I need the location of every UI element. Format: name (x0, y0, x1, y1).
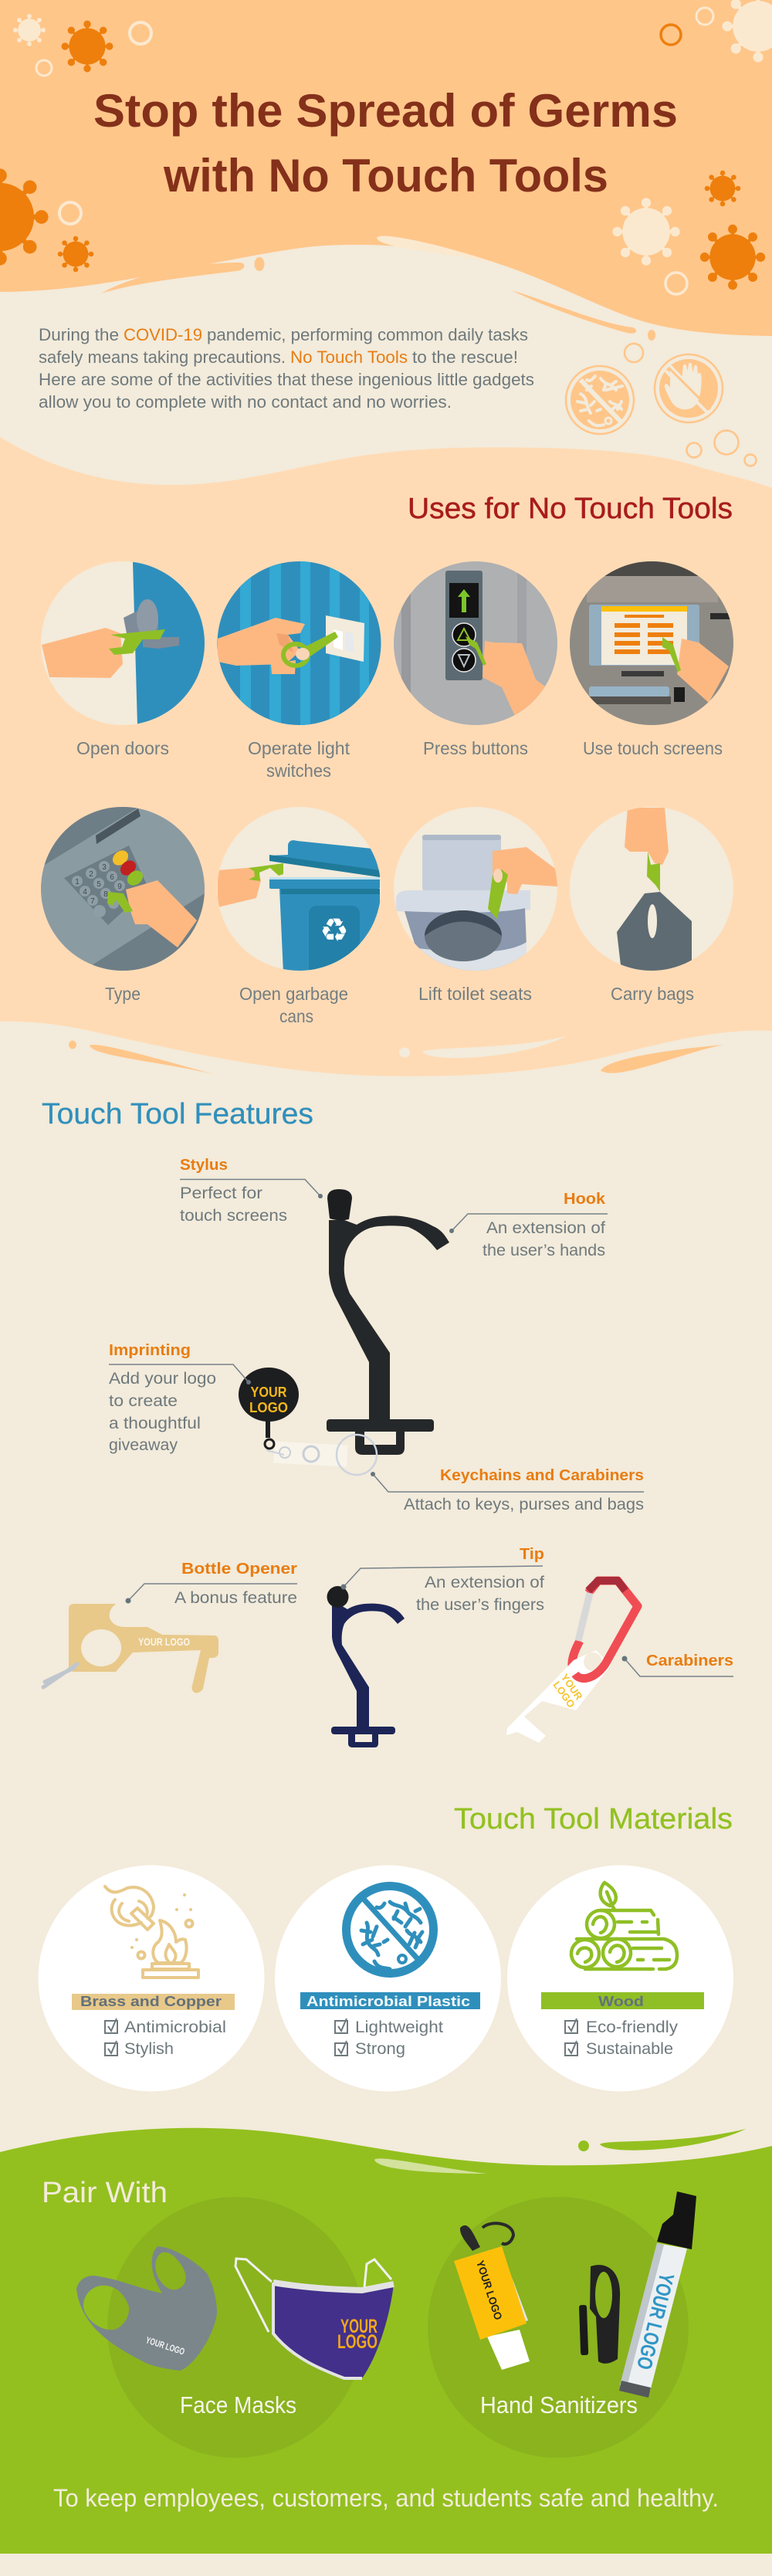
labels: uses row 1: switches (266, 761, 331, 781)
icon: recycle symbol: ♻ (320, 911, 349, 949)
decorative germs: left (0, 170, 93, 272)
panel: face masks circle (107, 2197, 364, 2458)
panel: hand sanitizers circle (428, 2197, 689, 2458)
labels: uses row 1: Use touch screens (583, 738, 723, 758)
use: operate light switches (217, 561, 381, 725)
callout: hook (449, 1191, 608, 1259)
product: clip-on hand sanitizer: YOUR LOGO (474, 2259, 505, 2321)
product: white touch tool with red carabiner: LOGO (551, 1679, 577, 1710)
intro text block (39, 325, 534, 412)
intro text block: to the rescue! (412, 347, 518, 367)
title (93, 85, 678, 202)
product: gray mask: YOUR LOGO (144, 2334, 186, 2357)
labels: uses row 2 (105, 984, 694, 1026)
product: sanitizer clip holder (579, 2265, 620, 2364)
labels: uses row 1: Press buttons (423, 738, 528, 758)
use: type: 7 (90, 897, 95, 906)
callout: hook: the user’s hands (482, 1242, 605, 1259)
decorative germs: top left (13, 14, 151, 76)
decorative swooshes: green section (374, 2129, 746, 2174)
callout: tip: An extension of (425, 1574, 544, 1591)
panel: antimicrobial plastic: Antimicrobial Plastic (306, 1994, 470, 2009)
checklist: brass: Stylish (124, 2040, 174, 2058)
use: press buttons (393, 561, 558, 734)
labels: uses row 2: Type (105, 984, 141, 1004)
label: hand sanitizers: Hand Sanitizers (480, 2391, 638, 2418)
product: retractable badge with logo (239, 1368, 377, 1475)
checklist: plastic: Strong (355, 2040, 405, 2058)
use: type: 1 (75, 878, 80, 886)
callout: keychains and carabiners: Attach to keys, purses and bags (404, 1496, 644, 1513)
callout: stylus: touch screens (180, 1207, 287, 1225)
callout: tip: the user’s fingers (416, 1596, 544, 1614)
heading: pair with: Pair With (42, 2177, 168, 2209)
callout: carabiners (622, 1652, 733, 1676)
product: brass touch tool: YOUR LOGO (138, 1635, 190, 1648)
heading: uses: Uses for No Touch Tools (408, 493, 733, 525)
use: garbage cans (217, 807, 381, 975)
closing statement: To keep employees, customers, and students safe and healthy. (53, 2484, 719, 2512)
product: brass touch tool (43, 1604, 218, 1693)
product: retractable badge with logo: YOUR (250, 1385, 287, 1400)
icon: brass melting over flame (105, 1886, 198, 1978)
callout: keychains and carabiners (371, 1467, 644, 1513)
labels: uses row 2: Open garbage (239, 984, 348, 1004)
decorative swooshes: header (101, 236, 655, 341)
panel: wood: Wood (598, 1994, 644, 2009)
callout: bottle opener: A bonus feature (174, 1589, 297, 1607)
callout: imprinting: a thoughtful (109, 1415, 201, 1432)
callout: bottle opener: Bottle Opener (181, 1561, 297, 1578)
callout: stylus: Stylus (180, 1157, 228, 1174)
background: green footer wave (0, 2128, 772, 2554)
intro text block: During the (39, 325, 119, 344)
icon: no bacteria (346, 1886, 434, 1974)
panel: brass and copper (39, 1866, 264, 2091)
callout: imprinting: to create (109, 1392, 178, 1410)
heading: features: Touch Tool Features (42, 1098, 313, 1130)
product: purple mask (235, 2259, 394, 2378)
use: type: 9 (117, 883, 122, 891)
decorative germs: top right (661, 0, 772, 62)
callout: stylus: Perfect for (180, 1185, 262, 1202)
decorative germs: right (613, 171, 764, 294)
intro text block: pandemic, performing common daily tasks (207, 325, 528, 344)
use: type: 6 (110, 873, 114, 882)
decorative rings (625, 344, 757, 466)
checklist: plastic (335, 2018, 443, 2058)
icon: no germs (566, 366, 634, 434)
callout: tip (341, 1546, 544, 1614)
use: type: 2 (89, 870, 93, 879)
panel: brass and copper: Brass and Copper (80, 1994, 222, 2009)
checklist: wood: Sustainable (586, 2040, 673, 2058)
product: white touch tool with red carabiner (506, 1581, 638, 1743)
checklist: wood: Eco-friendly (586, 2018, 679, 2036)
use: type: 3 (102, 863, 107, 872)
labels: uses row 2: Carry bags (611, 984, 694, 1004)
use: type: 8 (103, 890, 108, 899)
intro text block: allow you to complete with no contact and no worries. (39, 392, 452, 412)
labels: uses row 2: cans (279, 1006, 313, 1026)
product: black touch tool (327, 1189, 449, 1455)
callout: stylus (180, 1157, 323, 1225)
callout: imprinting: Imprinting (109, 1342, 191, 1359)
panel: antimicrobial plastic (275, 1866, 501, 2091)
product: spray pen sanitizer: YOUR LOGO (632, 2270, 679, 2372)
use: type: 5 (96, 880, 101, 889)
intro text block: safely means taking precautions. (39, 347, 286, 367)
title: Stop the Spread of Germs (93, 85, 678, 137)
checklist: wood (565, 2018, 679, 2058)
callout: hook: Hook (564, 1191, 606, 1208)
callout: imprinting: Add your logo (109, 1370, 216, 1388)
callout: keychains and carabiners: Keychains and Carabiners (440, 1467, 644, 1484)
product: clip-on hand sanitizer (454, 2223, 530, 2370)
product: purple mask: LOGO (337, 2331, 378, 2353)
panel: wood (507, 1866, 733, 2091)
product: white touch tool with red carabiner: YOUR (559, 1672, 585, 1703)
title: with No Touch Tools (163, 150, 608, 202)
intro text block: No Touch Tools (290, 347, 408, 367)
use: type: 4 (83, 888, 87, 897)
checklist: brass: Antimicrobial (124, 2018, 226, 2036)
use: carry bags (569, 807, 734, 974)
labels: uses row 1 (76, 738, 723, 781)
use: toilet seats (393, 807, 558, 974)
product: purple mask: YOUR (340, 2316, 378, 2337)
labels: uses row 2: Lift toilet seats (418, 984, 532, 1004)
background: uses section peach wave (0, 437, 772, 1076)
icon: logs with leaf (571, 1883, 677, 1969)
labels: uses row 1: Operate light (248, 738, 350, 758)
decorative swooshes: section divider (69, 1036, 723, 1075)
checklist: plastic: Lightweight (355, 2018, 443, 2036)
labels: uses row 1: Open doors (76, 738, 169, 758)
use: type (41, 807, 205, 971)
product: gray mask (76, 2246, 217, 2371)
callout: imprinting: giveaway (109, 1436, 178, 1454)
background: header orange wave (0, 0, 772, 336)
product: retractable badge with logo: LOGO (249, 1400, 288, 1415)
icon: no touch hand (655, 354, 723, 422)
heading: materials: Touch Tool Materials (454, 1803, 733, 1835)
callout: carabiners: Carabiners (646, 1652, 733, 1669)
product: navy touch tool (327, 1586, 405, 1747)
intro text block: COVID-19 (124, 325, 202, 344)
callout: tip: Tip (520, 1546, 544, 1563)
callout: bottle opener (125, 1561, 297, 1607)
callout: hook: An extension of (486, 1219, 605, 1237)
checklist: brass (105, 2018, 226, 2058)
use: open doors (41, 561, 208, 725)
intro text block: Here are some of the activities that these ingenious little gadgets (39, 370, 534, 389)
product: spray pen sanitizer (619, 2191, 696, 2398)
callout: imprinting (109, 1342, 251, 1454)
label: face masks: Face Masks (180, 2391, 296, 2418)
use: touch screens (569, 561, 734, 725)
